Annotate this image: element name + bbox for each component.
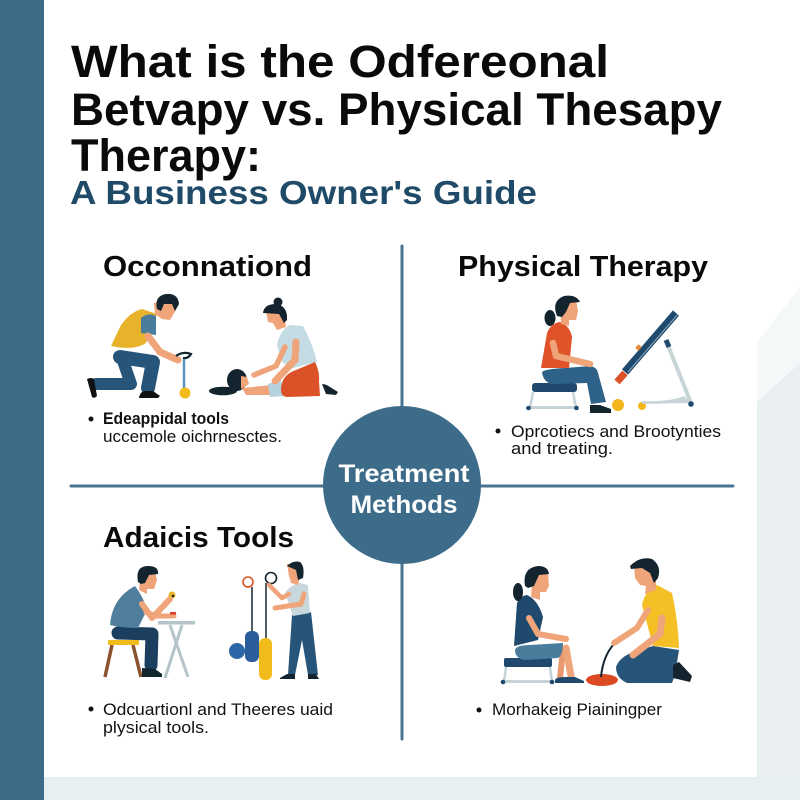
illustration: kneeling man with tool xyxy=(87,294,191,398)
text block: occupational tools: uccemole oichrnesctes. xyxy=(103,428,282,446)
left sidebar xyxy=(0,0,44,800)
illustration: man at table xyxy=(105,566,195,678)
text block: occupational tools xyxy=(88,410,282,446)
panel: planning xyxy=(476,558,692,719)
text block: tools: plysical tools. xyxy=(103,719,209,737)
text block: tools: Odcuartionl and Theeres uaid xyxy=(103,701,333,719)
text block: tools xyxy=(88,701,333,737)
panel: tools xyxy=(88,522,333,737)
illustration: seated woman and kneeling man xyxy=(501,558,692,686)
center circle: treatment methods: Methods xyxy=(350,491,458,519)
heading: physical therapy: Physical Therapy xyxy=(458,251,708,283)
text block: physical therapy: and treating. xyxy=(511,440,613,458)
text block: physical therapy: Oprcotiecs and Brootynties xyxy=(511,423,721,441)
illustration: therapist with lying patient xyxy=(209,298,338,397)
center circle: treatment methods xyxy=(323,406,481,564)
title: Betvapy vs. Physical Thesapy xyxy=(71,84,722,135)
heading: occupational: Occonnationd xyxy=(103,251,312,283)
title: Therapy: xyxy=(71,130,261,181)
title xyxy=(71,36,722,181)
quadrant divider lines xyxy=(71,246,733,739)
center circle: treatment methods: Treatment xyxy=(338,460,470,488)
illustration: seated woman with machine xyxy=(526,296,694,413)
panel: physical therapy xyxy=(458,251,721,458)
title: What is the Odfereonal xyxy=(71,36,609,87)
text block: occupational tools: Edeappidal tools xyxy=(103,410,229,428)
text block: planning: Morhakeig Piainingper xyxy=(492,701,663,719)
text block: physical therapy xyxy=(496,423,721,458)
subtitle: A Business Owner's Guide xyxy=(70,174,537,211)
panel: occupational xyxy=(87,251,338,446)
illustration: standing person with equipment xyxy=(229,562,319,680)
heading: tools: Adaicis Tools xyxy=(103,522,294,554)
